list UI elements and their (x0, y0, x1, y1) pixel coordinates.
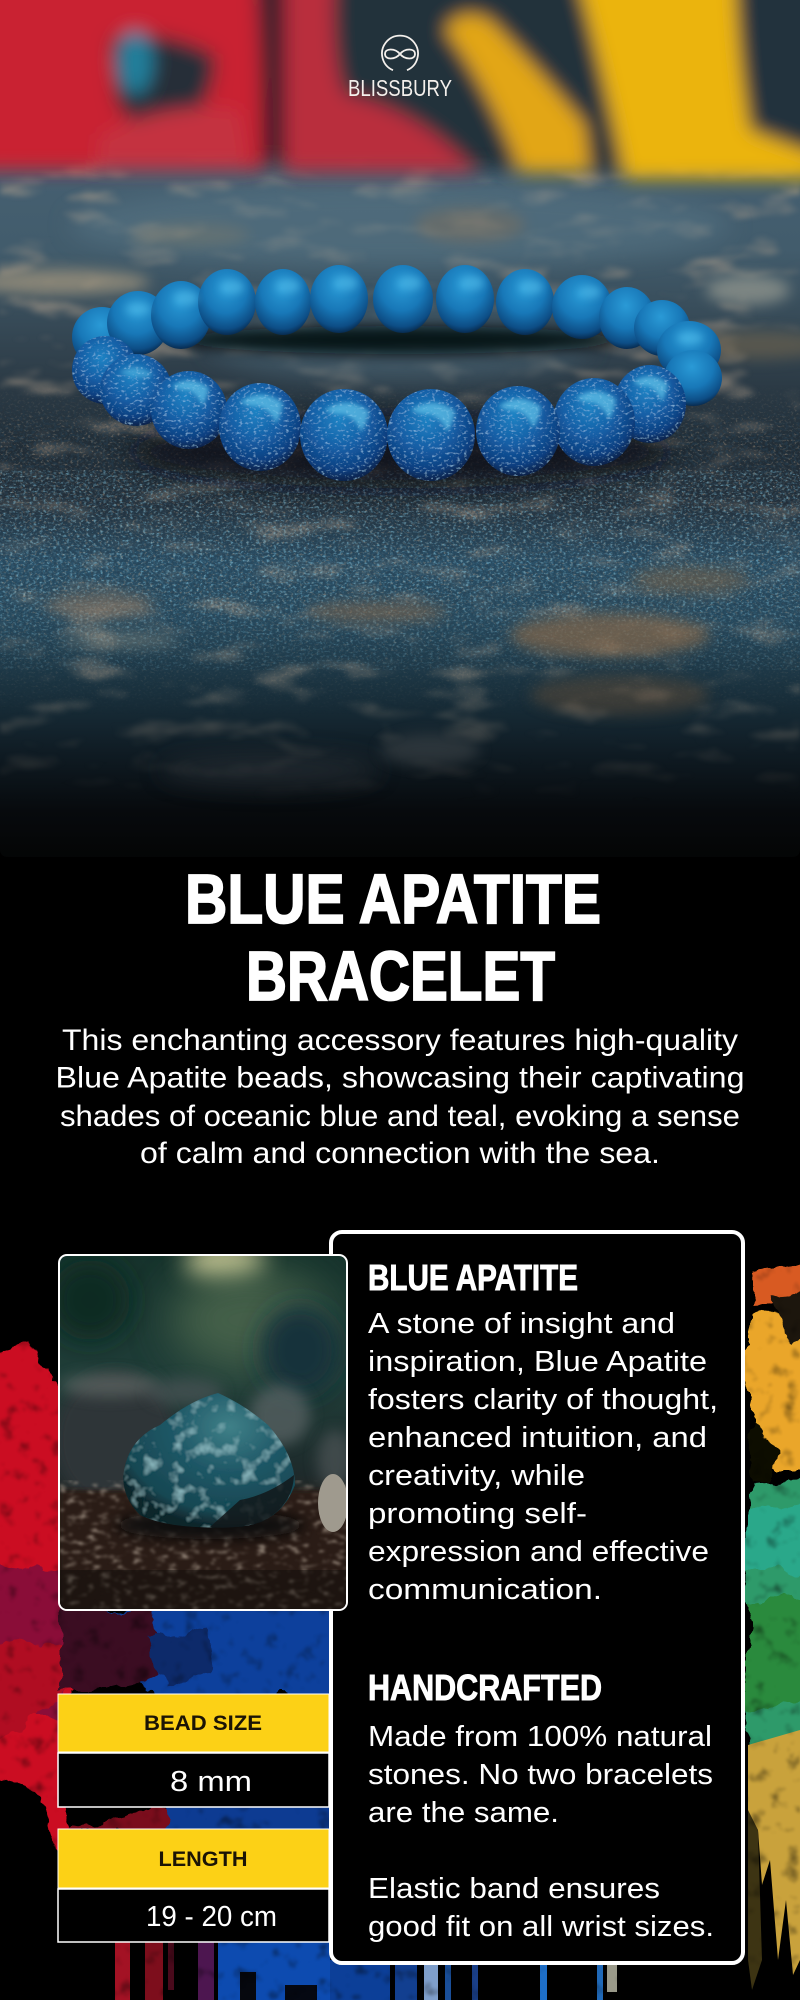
intro paragraph: shades of oceanic blue and teal, evoking a sense (60, 1100, 740, 1133)
text: Handcrafted description: good fit on all wrist sizes. (368, 1911, 714, 1943)
icon: infinity in circle (382, 36, 418, 70)
spec label: BEAD SIZE (144, 1712, 262, 1735)
spec value: 8 mm (170, 1766, 252, 1798)
photo: bracelet shadow (130, 326, 670, 488)
text: Blue Apatite description: inspiration, Blue Apatite (368, 1346, 707, 1378)
hero photo: bracelet on stone (0, 0, 800, 860)
text: Blue Apatite description: creativity, while (368, 1460, 585, 1492)
text: Blue Apatite description (368, 1308, 718, 1606)
background paint splashes (0, 1240, 800, 2000)
spec label: LENGTH (158, 1848, 248, 1871)
spec label (58, 1694, 329, 1752)
text: Handcrafted description: stones. No two bracelets (368, 1759, 713, 1791)
text: Blue Apatite description: A stone of insight and (368, 1308, 675, 1340)
photo: graffiti wall (0, 0, 800, 178)
text: Handcrafted description (368, 1721, 714, 1943)
back row highlights (126, 276, 703, 344)
text: Blue Apatite description: communication. (368, 1574, 602, 1606)
text: Blue Apatite description: expression and effective (368, 1536, 709, 1568)
spec: bead size (58, 1694, 329, 1807)
paint: right yellow drips (748, 1730, 800, 1990)
spec: length (58, 1829, 329, 1942)
paint: left red splash (0, 1345, 165, 1850)
paint: mottled shadow texture (0, 1240, 800, 2000)
intro paragraph: Blue Apatite beads, showcasing their captivating (56, 1062, 744, 1094)
paint: right green splash (748, 1478, 800, 1755)
photo: stone surface (0, 150, 800, 860)
title: BRACELET (246, 937, 555, 1015)
spec value (58, 1889, 329, 1942)
title: BLUE APATITE (185, 860, 601, 938)
intro paragraph: of calm and connection with the sea. (140, 1137, 660, 1170)
intro paragraph (56, 1024, 744, 1170)
spec value (58, 1753, 329, 1807)
icon: teal stone (123, 1393, 295, 1528)
text: Handcrafted description: are the same. (368, 1797, 559, 1829)
paint: right orange splash (748, 1262, 800, 1480)
icon: blue apatite bracelet (72, 265, 722, 481)
heading: Blue Apatite: BLUE APATITE (368, 1257, 578, 1298)
panel: text card (331, 1232, 743, 1963)
title (185, 860, 601, 1015)
logo wordmark: BLISSBURY (348, 75, 452, 101)
photo panel: raw blue apatite stone (50, 1244, 353, 1611)
text: Blue Apatite description: enhanced intuition, and (368, 1422, 707, 1454)
front row of beads (72, 336, 686, 481)
icon: pale pebble (318, 1474, 348, 1532)
spec label (58, 1829, 329, 1888)
paint: bottom drips (115, 1940, 617, 2000)
logo: Blissbury (348, 36, 452, 101)
text: Blue Apatite description: promoting self- (368, 1498, 587, 1530)
paint: centre blue splash (60, 1600, 345, 1835)
heading: Handcrafted: HANDCRAFTED (368, 1667, 602, 1708)
intro paragraph: This enchanting accessory features high-quality (62, 1024, 738, 1057)
back row of beads (72, 265, 722, 406)
spec value: 19 - 20 cm (146, 1901, 277, 1933)
text: Handcrafted description: Made from 100% natural (368, 1721, 712, 1753)
text: Handcrafted description: Elastic band ensures (368, 1873, 660, 1905)
front row highlights (120, 367, 668, 432)
text: Blue Apatite description: fosters clarity of thought, (368, 1384, 718, 1416)
